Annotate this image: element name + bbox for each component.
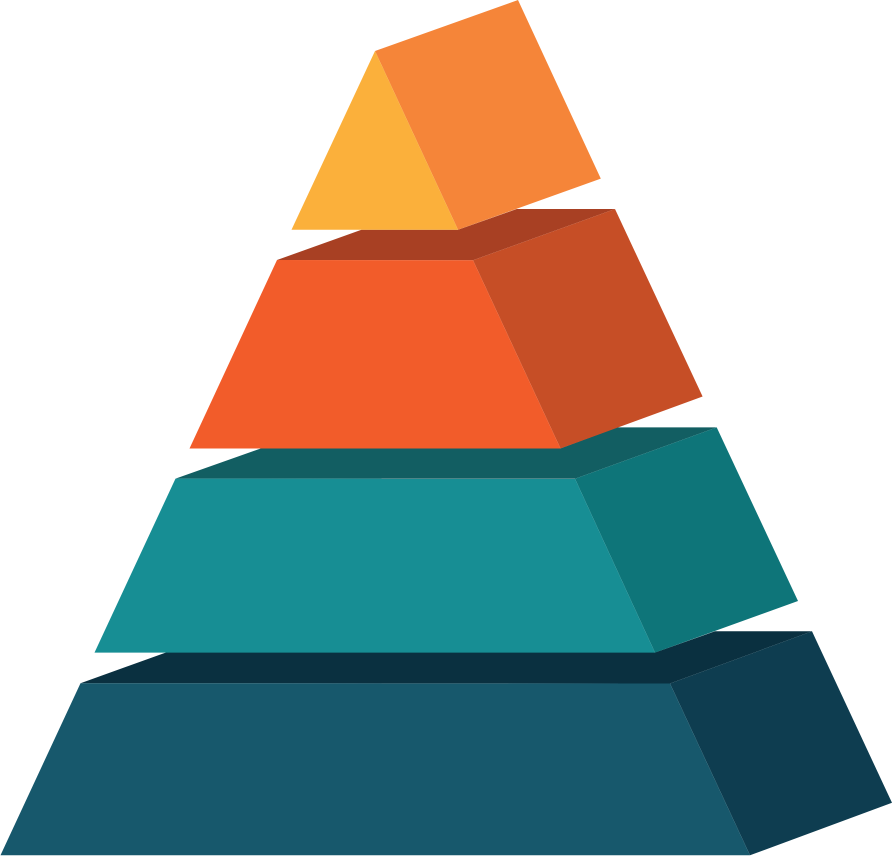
tier 1: top apex [292,0,601,230]
tier 3: teal [94,427,798,653]
tier 4: bottom navy [0,631,892,855]
tier 2: orange-red [190,209,703,448]
